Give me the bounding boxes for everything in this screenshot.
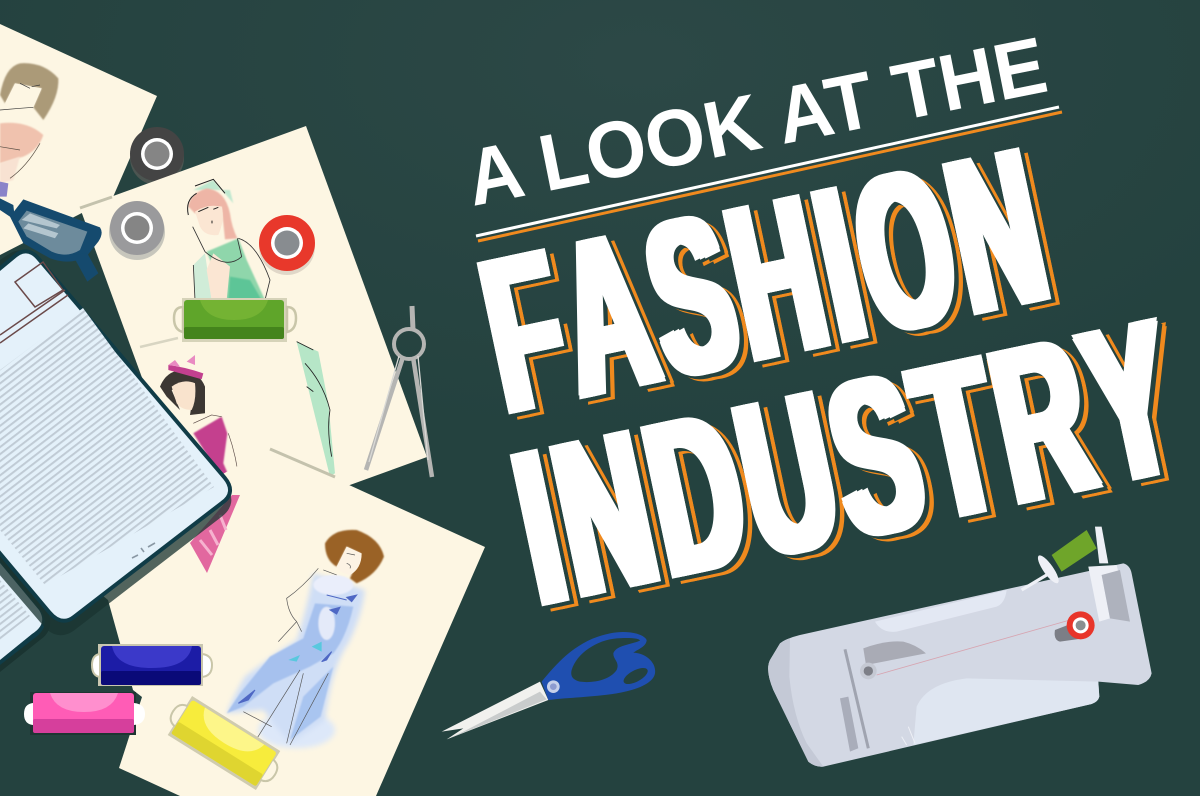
thread spool top view: red [259, 215, 315, 275]
paper: top-left sketch sheet [0, 24, 157, 255]
thread spool: yellow [161, 692, 287, 794]
thread spool top view: grey [109, 201, 165, 260]
tension wheel [1067, 611, 1095, 639]
thread spool: pink [24, 692, 145, 735]
tablet: lower page [0, 556, 50, 672]
title: A LOOK AT THE: A LOOK AT THE [459, 20, 1054, 223]
figure: pink dress sketch [160, 355, 239, 490]
double rule under heading [476, 107, 1062, 241]
paper: green dress sheet [80, 126, 427, 539]
figure: blue dress sketch [227, 530, 384, 748]
icon: sewing machine [768, 527, 1152, 767]
title: INDUSTRY: INDUSTRY [498, 271, 1200, 651]
thread spool: blue [92, 644, 212, 686]
thread spool: green [174, 298, 296, 342]
icon: blue glasses [0, 198, 102, 282]
page number mark [132, 543, 155, 558]
thread spool top view: dark [130, 127, 184, 185]
picture box on page [0, 262, 68, 343]
tablet: main page with text lines [0, 255, 227, 629]
figure: brown-haired sketch [0, 63, 58, 197]
title: FASHION: FASHION [465, 101, 1069, 459]
icon: scissors [442, 632, 655, 739]
text lines on page [0, 308, 214, 585]
figure: green dress sketch [188, 179, 335, 477]
paper: blue dress sheet [60, 449, 485, 796]
thread spool on pin [1095, 527, 1108, 563]
icon: compass [366, 306, 432, 477]
machine body [768, 563, 1152, 767]
figure: pink skirt below tablet corner [190, 495, 240, 573]
